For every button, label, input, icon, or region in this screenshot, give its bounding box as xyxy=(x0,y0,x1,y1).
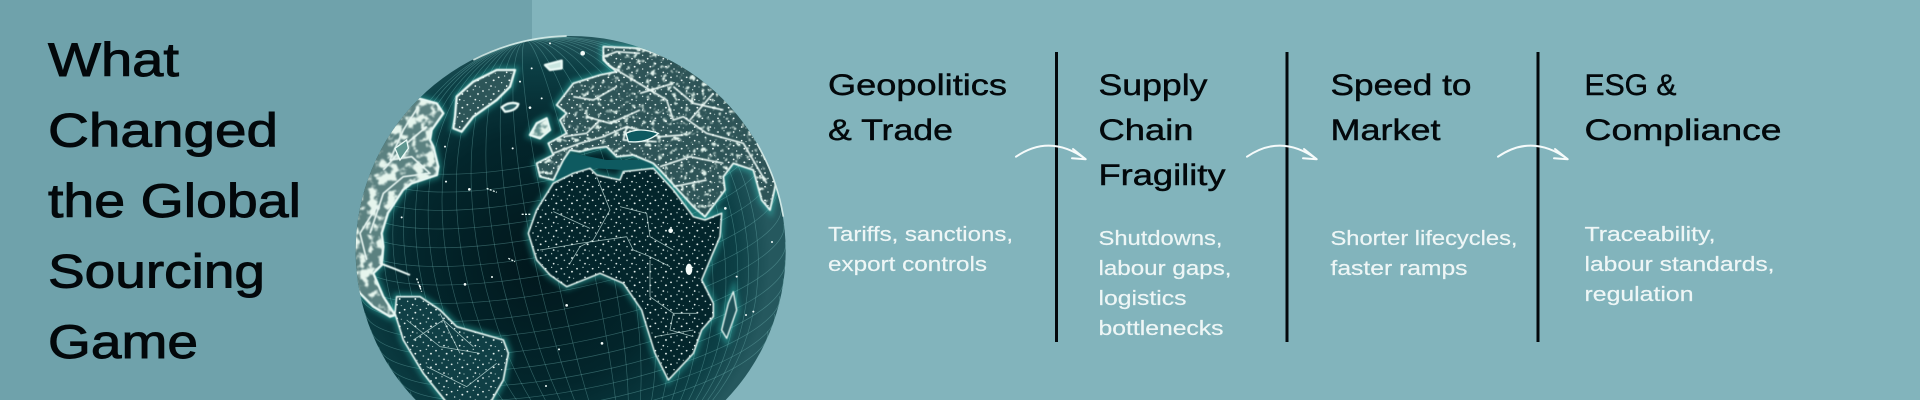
text: supply chain detail: logistics xyxy=(1098,287,1186,310)
heading: speed to market: Speed to xyxy=(1330,69,1472,102)
text: esg detail: labour standards, xyxy=(1584,253,1774,276)
text: speed detail: faster ramps xyxy=(1330,257,1468,280)
heading: supply chain fragility: Fragility xyxy=(1098,159,1226,192)
panel: speed to market xyxy=(1330,69,1518,280)
arrow: supply chain to speed xyxy=(1247,146,1317,159)
text: speed detail xyxy=(1330,227,1518,280)
arrow: speed to esg xyxy=(1498,146,1568,159)
heading: geopolitics and trade: Geopolitics xyxy=(828,69,1007,102)
heading: geopolitics and trade: & Trade xyxy=(828,114,953,147)
heading: supply chain fragility: Chain xyxy=(1098,114,1194,147)
title: Game xyxy=(48,315,198,368)
text: supply chain detail xyxy=(1098,227,1232,340)
text: supply chain detail: labour gaps, xyxy=(1098,257,1232,280)
title xyxy=(48,33,301,368)
text: geopolitics detail: Tariffs, sanctions, xyxy=(828,223,1013,246)
heading: esg and compliance: Compliance xyxy=(1584,114,1782,147)
panel: supply chain fragility xyxy=(1098,69,1232,340)
heading: esg and compliance: ESG & xyxy=(1584,69,1676,102)
title: Sourcing xyxy=(48,244,265,298)
left title panel xyxy=(0,0,532,400)
panel: esg and compliance xyxy=(1584,69,1782,306)
text: esg detail: regulation xyxy=(1584,283,1694,306)
text: speed detail: Shorter lifecycles, xyxy=(1330,227,1518,250)
arrow: geopolitics to supply chain xyxy=(1016,146,1086,159)
title: What xyxy=(48,33,179,86)
text: geopolitics detail xyxy=(828,223,1013,276)
title: Changed xyxy=(48,104,278,156)
title: the Global xyxy=(48,174,301,227)
text: supply chain detail: bottlenecks xyxy=(1098,317,1224,340)
heading: supply chain fragility xyxy=(1098,69,1226,192)
panel: geopolitics and trade xyxy=(828,69,1013,276)
heading: supply chain fragility: Supply xyxy=(1098,69,1208,102)
heading: speed to market xyxy=(1330,69,1472,147)
heading: geopolitics and trade xyxy=(828,69,1007,147)
text: geopolitics detail: export controls xyxy=(828,253,987,276)
text: supply chain detail: Shutdowns, xyxy=(1098,227,1222,250)
text: esg detail: Traceability, xyxy=(1584,223,1716,246)
icon: glowing globe xyxy=(356,35,786,400)
text: esg detail xyxy=(1584,223,1774,306)
heading: esg and compliance xyxy=(1584,69,1782,147)
heading: speed to market: Market xyxy=(1330,114,1441,147)
